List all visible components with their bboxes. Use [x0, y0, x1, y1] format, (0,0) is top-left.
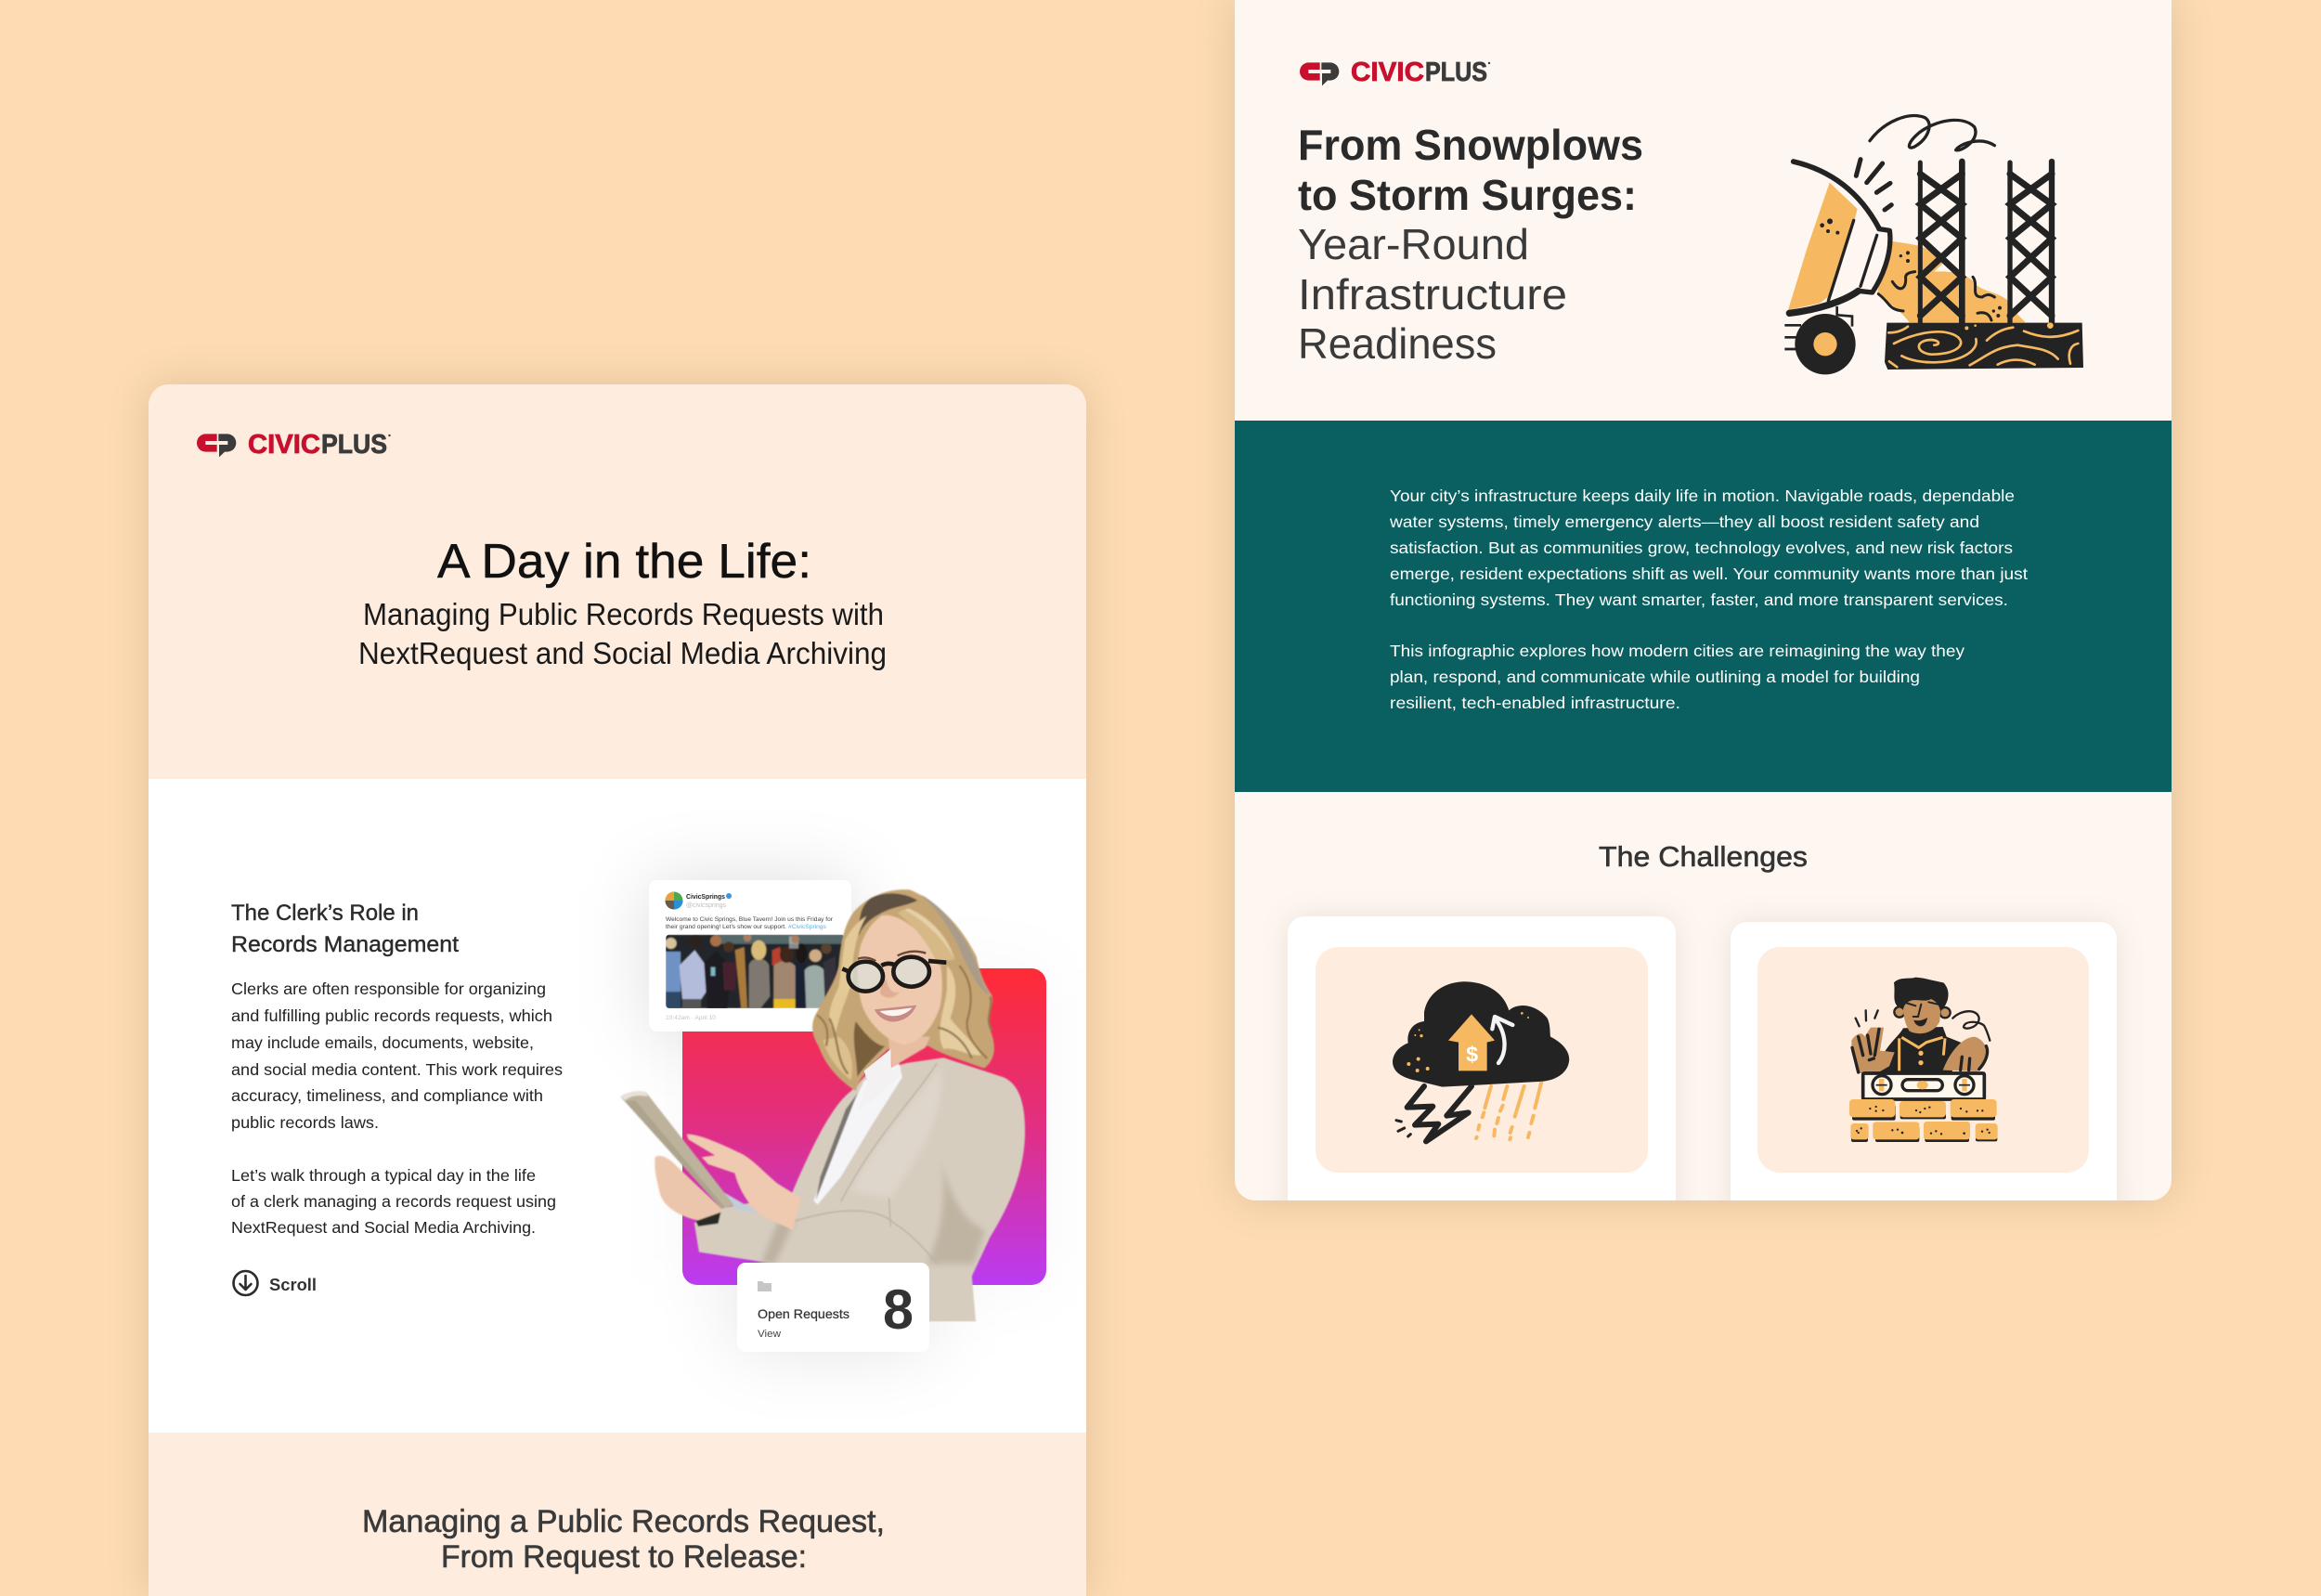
subtitle [358, 597, 887, 670]
subtitle: Managing Public Records Requests with [363, 597, 884, 631]
hands [655, 1156, 721, 1221]
sleeve cuff [724, 1192, 758, 1213]
tweet text: 10:42am · April 10 [666, 1015, 716, 1021]
icon: folder [758, 1281, 772, 1291]
title: from snowplows: From Snowplows [1298, 121, 1643, 169]
scroll prompt [234, 1271, 317, 1295]
subtitle: NextRequest and Social Media Archiving [358, 636, 887, 670]
intro paragraph: plan, respond, and communicate while outlining a model for building [1390, 668, 1920, 686]
intro paragraph [1389, 487, 2028, 712]
heading: managing a public records request [362, 1504, 885, 1575]
logo wordmark: CIVIC [1351, 58, 1424, 87]
challenge card 1 [1288, 916, 1676, 1232]
hands [1851, 1028, 1895, 1073]
dollar sign: $ [1466, 1042, 1478, 1066]
photo collage soft shadows [626, 858, 940, 1368]
tweet text: #CivicSprings [788, 924, 827, 930]
woman head [812, 889, 994, 1111]
teal band [1235, 421, 2172, 792]
intro paragraph: satisfaction. But as communities grow, technology evolves, and new risk factors [1390, 538, 2013, 557]
spirit level [1863, 1073, 1984, 1099]
rebar towers [1920, 162, 2052, 322]
blazer shading [761, 1067, 985, 1264]
gradient backdrop panel [682, 968, 1046, 1285]
tweet text: their grand opening! Let’s show our support. [666, 924, 786, 930]
body text: clerk's role: may include emails, documents, website, [231, 1033, 534, 1052]
logo wordmark [248, 430, 391, 460]
left card content [149, 384, 1086, 1596]
tablet [620, 1091, 734, 1209]
hair [1894, 978, 1949, 1010]
footer band [149, 1433, 1086, 1596]
poured concrete [1877, 241, 2026, 322]
illustration: cement mixer pouring over rebar [1784, 116, 2083, 374]
wheel [1784, 306, 1856, 374]
photo: woman with tablet [620, 889, 1025, 1322]
glasses [842, 957, 946, 992]
cheek and nose shading [880, 980, 900, 998]
hair right grey tone [921, 894, 991, 995]
tweet text: Welcome to Civic Springs, Blue Tavern! Join us this Friday for [666, 916, 834, 923]
heading: managing a public records request: Managing a Public Records Request, [362, 1504, 885, 1539]
card shadow: left [149, 384, 1086, 1596]
body text: clerk's role: public records laws. [231, 1113, 379, 1132]
subtitle: year-round infrastructure readiness: Year-Round [1298, 220, 1529, 268]
intro paragraph: functioning systems. They want smarter, faster, and more transparent services. [1390, 590, 2008, 609]
gesture marks and squiggle [1856, 1010, 1990, 1041]
intro paragraph: emerge, resident expectations shift as well. Your community wants more than just [1390, 564, 2028, 583]
heading: the clerk's role: Records Management [231, 932, 459, 957]
open requests label: Open Requests [758, 1306, 849, 1321]
panel: from snowplows to storm surges card [1235, 0, 2172, 1238]
header band [149, 384, 1086, 779]
view link: View [758, 1329, 781, 1340]
card shadow: right [1235, 0, 2172, 1200]
right card content [1235, 0, 2172, 1238]
white section [149, 779, 1086, 1433]
tweet avatar [665, 891, 683, 910]
title: A Day in the Life: A Day in the Life: [437, 535, 811, 589]
brick wall [1849, 1099, 1998, 1142]
collar and buttons [1900, 1037, 1945, 1070]
white curved arrow [1492, 1017, 1512, 1063]
cream page [1235, 0, 2172, 1200]
body text: clerk's role: NextRequest and Social Media Archiving. [231, 1218, 536, 1237]
intro paragraph: Your city’s infrastructure keeps daily life in motion. Navigable roads, dependable [1390, 487, 2015, 505]
heading: the challenges: The Challenges [1599, 840, 1808, 873]
logo mark [197, 434, 236, 457]
title: from snowplows [1298, 121, 1643, 219]
illustration: storm cloud with rising cost [1393, 981, 1569, 1141]
cloud speckles [1407, 1012, 1529, 1072]
title: from snowplows: to Storm Surges: [1298, 171, 1637, 219]
blazer seams [795, 1063, 937, 1264]
logo wordmark: CIVIC [248, 430, 320, 460]
ears [1894, 1006, 1905, 1018]
illustration: man with level on brick wall [1849, 978, 1998, 1142]
tweet card [649, 880, 851, 1032]
heading: the clerk's role [231, 901, 459, 957]
neck [888, 1037, 930, 1068]
shirt [813, 1063, 902, 1204]
torso [1866, 1027, 1964, 1074]
logo: CivicPlus right [1300, 58, 1490, 87]
woman body [620, 1058, 1025, 1322]
body text: clerk's role: of a clerk managing a records request using [231, 1192, 556, 1211]
heading: managing a public records request: From Request to Release: [441, 1539, 807, 1575]
face [858, 915, 942, 1045]
hair strand over forehead [898, 909, 954, 966]
intro paragraph: resilient, tech-enabled infrastructure. [1390, 694, 1680, 712]
logo wordmark [1351, 58, 1490, 87]
intro paragraph: water systems, timely emergency alerts—they all boost resident safety and [1389, 513, 1979, 531]
hair mass [812, 889, 994, 1091]
logo wordmark: PLUS [321, 430, 387, 460]
body text: clerk's role: and fulfilling public records requests, which [231, 1006, 552, 1025]
tweet text: CivicSprings [686, 894, 725, 901]
subtitle: year-round infrastructure readiness: Infrastructure [1298, 270, 1567, 318]
hair highlights [898, 908, 954, 959]
body text: clerk's role [231, 980, 563, 1237]
mixer drum fill [1788, 183, 1858, 310]
logo wordmark: PLUS [1425, 58, 1487, 87]
cloud [1393, 981, 1569, 1087]
open requests count: 8 [883, 1278, 914, 1341]
challenge card 2 [1731, 922, 2117, 1200]
mixer outline [1789, 116, 1994, 320]
lightning bolt [1407, 1086, 1472, 1141]
lightning sparks [1396, 1121, 1410, 1136]
smile [1913, 1018, 1927, 1026]
logo: CivicPlus left [197, 430, 391, 460]
brows [858, 952, 926, 961]
log [1885, 322, 2083, 370]
body text: clerk's role: Clerks are often responsible for organizing [231, 980, 546, 998]
hair curls [817, 966, 992, 1074]
rain [1476, 1083, 1541, 1139]
white challenge card shadows [1288, 916, 2117, 1238]
panel: a day in the life card [149, 384, 1086, 1596]
body text: clerk's role: accuracy, timeliness, and compliance with [231, 1086, 543, 1105]
subtitle: year-round infrastructure readiness [1298, 220, 1567, 368]
tweet photo: crowd [666, 934, 845, 1009]
rising arrow with dollar sign [1448, 1014, 1495, 1070]
body text: clerk's role: and social media content. This work requires [231, 1060, 563, 1079]
heading: the clerk's role: The Clerk’s Role in [231, 901, 419, 926]
tweet text [666, 893, 834, 1021]
collar [857, 1049, 901, 1111]
smile [875, 1006, 916, 1022]
subtitle: year-round infrastructure readiness: Readiness [1298, 319, 1497, 368]
open requests card [737, 1263, 929, 1352]
body text: clerk's role: Let’s walk through a typical day in the life [231, 1166, 536, 1185]
head [1903, 996, 1941, 1033]
facial features [1906, 1002, 1938, 1017]
intro paragraph: This infographic explores how modern cities are reimagining the way they [1390, 642, 1964, 660]
tweet text: @civicsprings [686, 902, 726, 909]
hair dark crown [859, 893, 917, 936]
scroll prompt: Scroll [269, 1276, 317, 1294]
blazer [694, 1058, 1025, 1322]
mixer speckles [1820, 218, 2002, 318]
logo mark [1300, 62, 1339, 85]
